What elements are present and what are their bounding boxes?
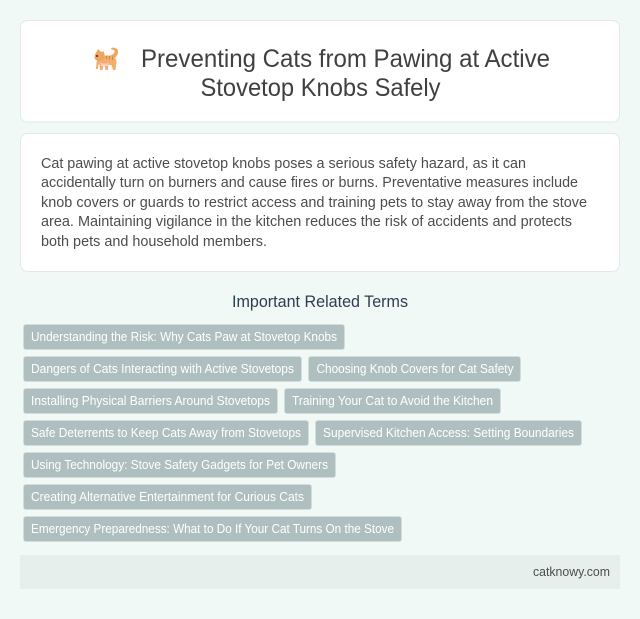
tag [24,388,278,414]
tag [284,388,500,414]
tag [24,420,308,446]
text block: description: area. Maintaining vigilance in the kitchen reduces the risk of accidents and protects [41,214,572,230]
footer [20,555,620,589]
tag list [24,324,582,542]
panel: description card [20,134,620,272]
tag [308,356,520,382]
tag: Creating Alternative Entertainment for Curious Cats [31,490,304,504]
text block: description [41,156,587,250]
tag: Training Your Cat to Avoid the Kitchen [292,394,493,408]
tag: Dangers of Cats Interacting with Active Stovetops [31,362,294,376]
tag: Emergency Preparedness: What to Do If Your Cat Turns On the Stove [31,522,394,536]
footer source text: catknowy.com [533,564,610,579]
tag [24,452,336,478]
tag: Choosing Knob Covers for Cat Safety [316,362,514,376]
text block: description: Cat pawing at active stovetop knobs poses a serious safety hazard, as it can [41,156,526,172]
title [141,45,550,102]
tag: Installing Physical Barriers Around Stovetops [31,394,270,408]
tag [24,484,312,510]
tag [24,356,302,382]
tag: Understanding the Risk: Why Cats Paw at Stovetop Knobs [31,330,337,344]
tag: Using Technology: Stove Safety Gadgets for Pet Owners [31,458,328,472]
tag [24,324,344,350]
heading: important related terms: Important Related Terms [232,293,408,311]
tag: Safe Deterrents to Keep Cats Away from Stovetops [31,426,301,440]
title: Stovetop Knobs Safely [200,74,441,102]
panel: title card [20,20,620,122]
tag: Supervised Kitchen Access: Setting Boundaries [323,426,574,440]
icon: cat [95,48,118,70]
title: Preventing Cats from Pawing at Active [141,45,550,73]
text block: description: both pets and household members. [41,234,267,250]
tag [316,420,582,446]
text block: description: accidentally turn on burners and cause fires or burns. Preventative measures include [41,175,578,191]
tag [24,516,402,542]
text block: description: knob covers or guards to restrict access and training pets to stay away from the stove [41,195,587,211]
